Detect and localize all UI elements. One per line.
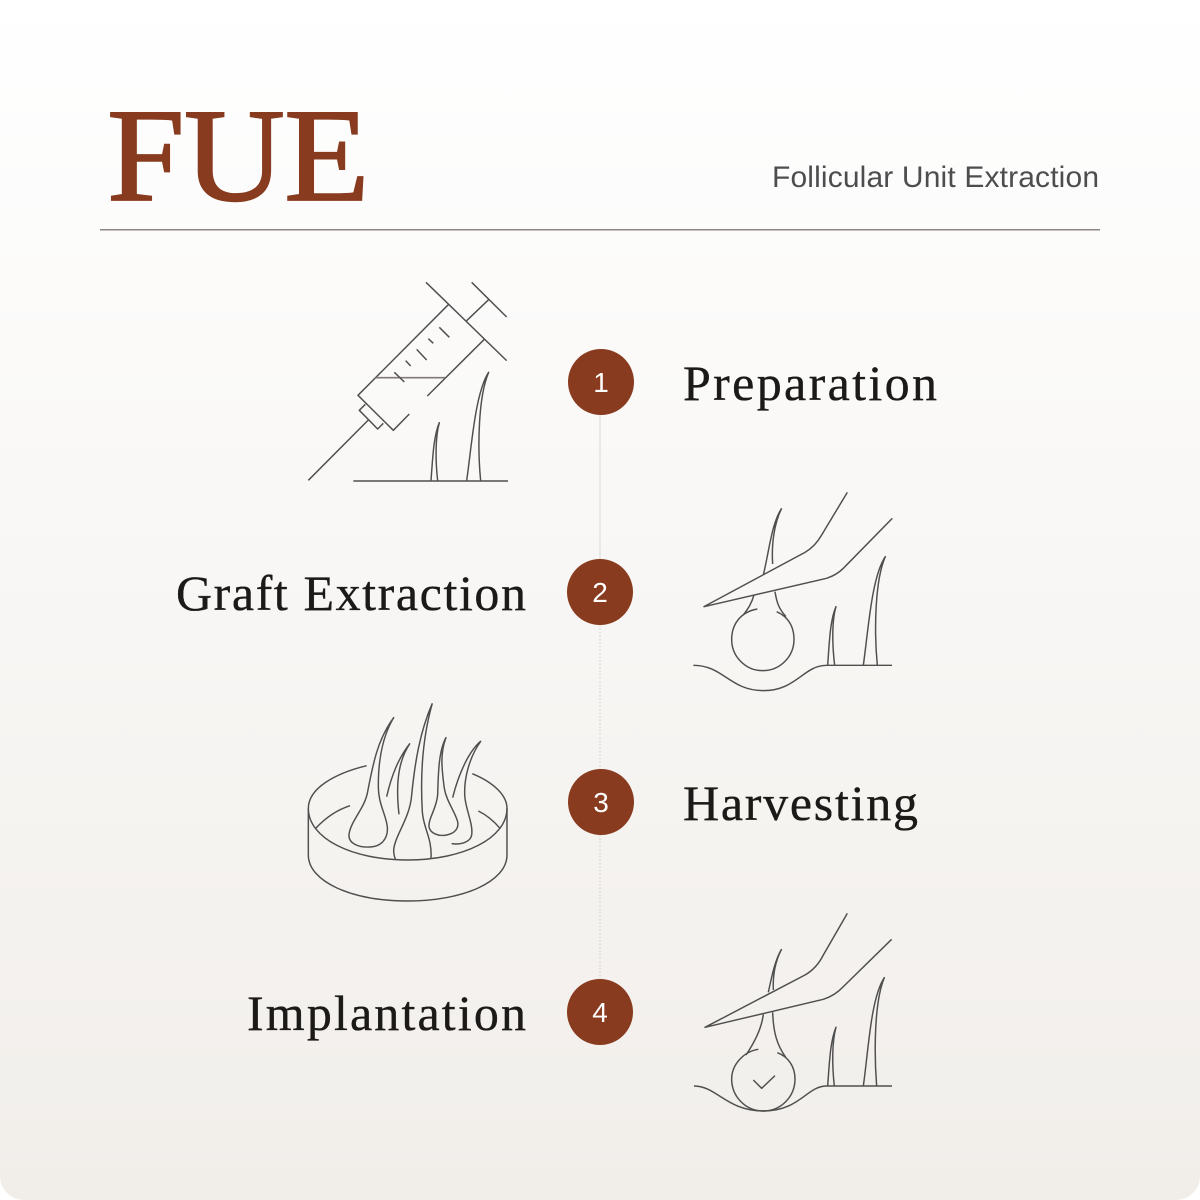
icon: syringe and hairs	[308, 282, 508, 481]
step 3 badge: 3	[593, 787, 609, 818]
step 2 badge: 2	[592, 577, 608, 608]
step 4 badge	[567, 979, 633, 1045]
icon: tweezers implanting graft	[694, 913, 892, 1111]
header divider	[100, 229, 1100, 230]
step 1 badge	[568, 349, 634, 415]
timeline connector	[599, 414, 601, 980]
step 3 badge	[568, 769, 634, 835]
step 4 badge: 4	[592, 997, 608, 1028]
step 1 label: Preparation	[683, 355, 937, 411]
subtitle: Follicular Unit Extraction	[772, 161, 1099, 194]
icon: tweezers extracting graft	[693, 492, 892, 691]
step 4 label: Implantation	[247, 985, 526, 1041]
step 1 badge: 1	[593, 367, 609, 398]
title: FUE	[107, 82, 370, 229]
step 3 label: Harvesting	[683, 775, 918, 831]
step 2 badge	[567, 559, 633, 625]
step 2 label: Graft Extraction	[176, 565, 526, 621]
icon: dish of follicles	[308, 703, 507, 901]
